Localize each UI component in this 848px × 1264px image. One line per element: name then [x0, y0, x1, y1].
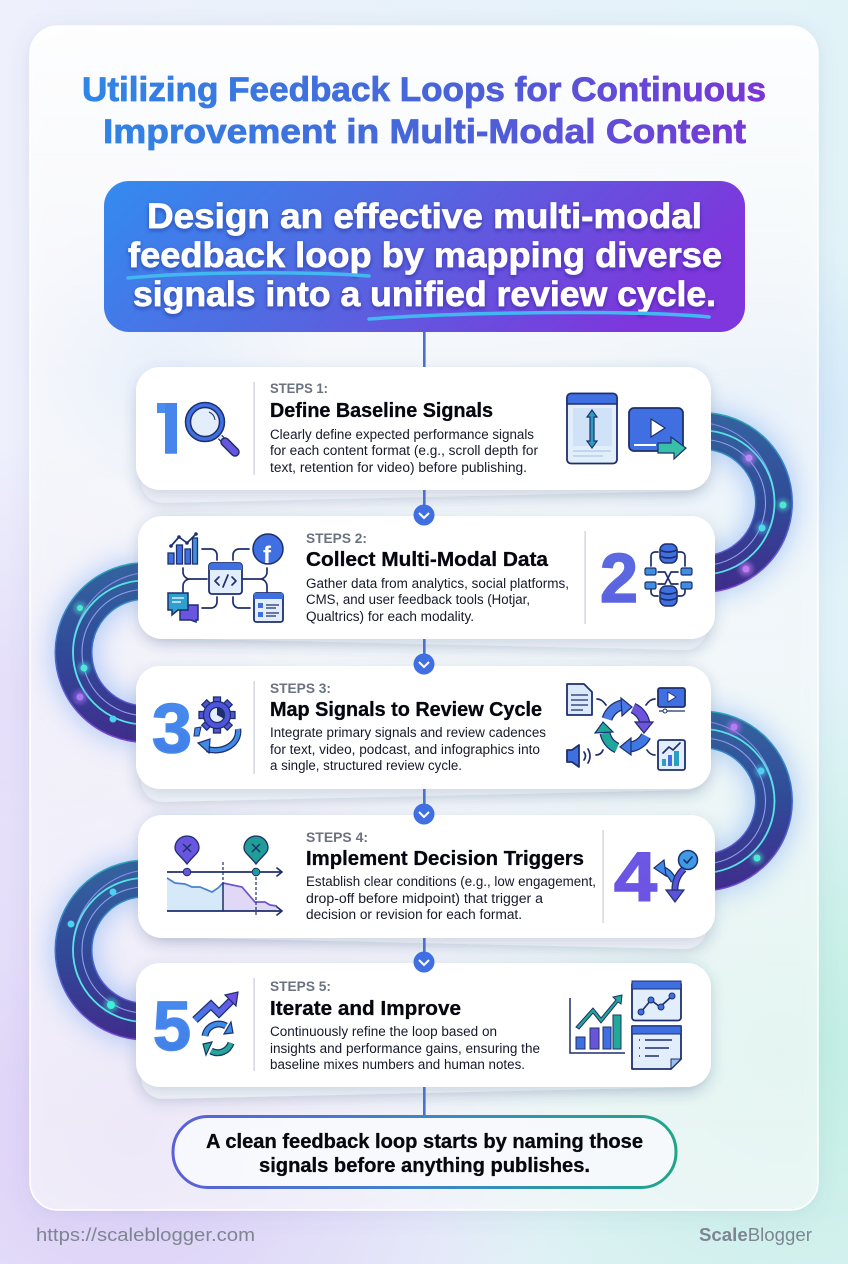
text: step 1: STEPS 1: — [270, 380, 328, 396]
arrow: step connector 2 — [414, 639, 434, 674]
text: step 3: STEPS 3: — [270, 680, 331, 696]
loop: right 1 — [694, 422, 789, 576]
text: step 4 — [306, 829, 596, 922]
title — [82, 71, 766, 151]
text: step 3 — [270, 680, 546, 773]
title: Improvement in Multi-Modal Content — [103, 113, 746, 151]
text: step 5: baseline mixes numbers and human notes. — [270, 1057, 525, 1072]
icon: data network: f — [263, 542, 272, 569]
icon: scroll page — [567, 394, 617, 464]
text: step 2: CMS, and user feedback tools (Hotjar, — [306, 592, 530, 607]
connector: step 5 to callout — [423, 1087, 426, 1117]
banner: Design an effective multi-modal — [147, 197, 702, 236]
arrow: step connector 4 — [414, 938, 434, 972]
text: step 1: Define Baseline Signals — [270, 400, 493, 422]
icon: magnifier — [186, 402, 235, 452]
card 2 — [138, 516, 715, 650]
footer: url: https://scaleblogger.com — [36, 1225, 255, 1245]
text: step 2: STEPS 2: — [306, 530, 367, 546]
number 5: 5 — [153, 987, 191, 1065]
text: step 3: for text, video, podcast, and infographics into — [270, 742, 540, 757]
text: step 1 — [270, 380, 538, 475]
chart: decision timeline — [167, 836, 282, 917]
loop: left 2 — [73, 572, 153, 724]
text: step 2: Collect Multi-Modal Data — [306, 549, 549, 571]
text: step 3: a single, structured review cycle. — [270, 758, 462, 773]
loop: left 4 — [68, 870, 153, 1022]
text: step 2: Gather data from analytics, social platforms, — [306, 576, 569, 591]
icon: video with arrow — [629, 408, 686, 459]
icon: growth and refresh — [195, 992, 238, 1055]
connector: banner to step 1 — [423, 331, 426, 368]
text: step 4: STEPS 4: — [306, 829, 368, 845]
icon: gear and loop — [194, 697, 238, 753]
text: step 5 — [270, 978, 540, 1072]
arrow: step connector 3 — [414, 789, 434, 824]
text: step 1: for each content format (e.g., scroll depth for — [270, 443, 538, 458]
banner: signals into a unified review cycle. — [133, 275, 716, 314]
number 3: 3 — [152, 689, 192, 767]
text: step 4: decision or revision for each format. — [306, 907, 522, 922]
text: step 1: text, retention for video) before publishing. — [270, 460, 527, 475]
text: step 5: insights and performance gains, ensuring the — [270, 1041, 540, 1056]
callout: closing message: A clean feedback loop starts by naming those — [206, 1131, 643, 1153]
card 1 — [136, 367, 711, 503]
icon: chart and reports — [570, 981, 681, 1069]
text: step 2: Qualtrics) for each modality. — [306, 609, 474, 624]
text: step 2 — [306, 530, 569, 624]
callout: closing message — [173, 1116, 676, 1188]
number 2: 2 — [600, 539, 638, 617]
text: step 4: Implement Decision Triggers — [306, 848, 584, 870]
loop: right 3 — [694, 720, 775, 873]
icon: database map — [645, 544, 692, 606]
arrow: step connector 1 — [414, 490, 434, 526]
text: step 3: Map Signals to Review Cycle — [270, 699, 542, 721]
card 3 — [136, 666, 711, 802]
banner: feedback loop by mapping diverse — [128, 236, 722, 275]
text: step 3: Integrate primary signals and review cadences — [270, 725, 546, 740]
card 4 — [138, 815, 715, 949]
card 5 — [136, 963, 711, 1099]
title: Utilizing Feedback Loops for Continuous — [82, 71, 766, 109]
icon: review cycle — [567, 684, 685, 770]
text: step 1: Clearly define expected performance signals — [270, 427, 534, 442]
text: step 4: drop-off before midpoint) that trigger a — [306, 891, 543, 906]
number 1: 1 — [150, 390, 189, 468]
icon: decision arrows — [654, 850, 698, 902]
banner — [104, 181, 745, 332]
text: step 4: Establish clear conditions (e.g., low engagement, — [306, 874, 596, 889]
footer: brand: ScaleBlogger — [699, 1225, 812, 1245]
icon: data network — [168, 532, 283, 622]
text: step 5: Iterate and Improve — [270, 998, 461, 1020]
text: step 5: STEPS 5: — [270, 978, 331, 994]
text: step 5: Continuously refine the loop based on — [270, 1024, 497, 1039]
number 4: 4 — [614, 838, 657, 916]
callout: closing message: signals before anything publishes. — [259, 1155, 590, 1177]
